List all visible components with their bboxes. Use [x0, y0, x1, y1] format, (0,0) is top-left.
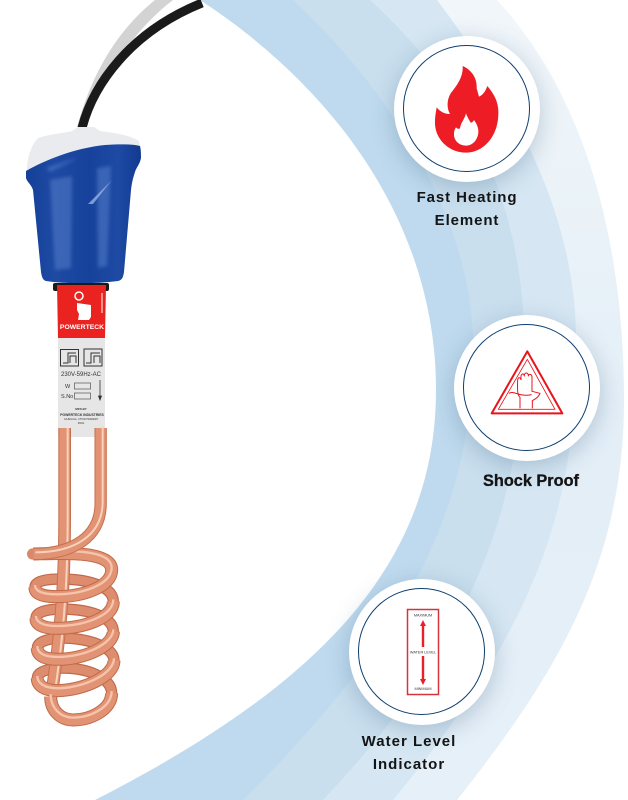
white plug cap [27, 127, 141, 176]
ISI mark right [84, 349, 102, 366]
label: water level indicator [362, 733, 456, 773]
ISI mark left [60, 350, 78, 366]
black cable [82, 3, 202, 128]
plug highlights [46, 158, 111, 270]
label: fast heating element: Fast Heating [417, 189, 517, 206]
black collar [53, 283, 109, 291]
icon: water level gauge: WATER LEVEL [410, 650, 436, 654]
brand name: POWERTECK [60, 324, 104, 331]
arrow [98, 380, 102, 400]
icon: flame badge [394, 36, 540, 182]
blue plug body [26, 144, 141, 283]
icon: water level gauge: MINIMUM [414, 687, 432, 691]
manufacturer text: INDIA [78, 422, 85, 425]
icon: flame [435, 66, 498, 153]
icon: warning triangle with hand [492, 351, 562, 413]
plug glint [88, 180, 112, 204]
gray cable [77, 0, 173, 127]
label: shock proof: Shock Proof [483, 472, 579, 490]
coil back arcs [35, 579, 114, 693]
left tube [52, 428, 68, 693]
icon: water level gauge: MAXIMUM [414, 614, 432, 618]
copper heating coil [27, 426, 114, 720]
label: fast heating element: Element [435, 212, 499, 229]
manufacturer text: POWERTECK INDUSTRIES [60, 413, 104, 417]
feature: water level indicator [340, 575, 506, 773]
serial row: S.No [61, 394, 73, 400]
tag down arrow [101, 293, 103, 313]
wattage row: W [65, 384, 71, 390]
label: water level indicator: Water Level [362, 733, 456, 750]
coil end cap [27, 548, 38, 560]
voltage text: 230V-59Hz-AC [61, 372, 102, 378]
icon: water level badge [349, 579, 495, 725]
icon: shock badge [454, 315, 600, 461]
white specification label [58, 338, 105, 437]
right lead tube [33, 426, 103, 554]
label: water level indicator: Indicator [373, 756, 445, 773]
manufacturer text: GAJRAULA, UTTAR PRADESH [64, 418, 98, 421]
coil front arcs [33, 551, 114, 720]
icon: water level gauge [408, 610, 438, 694]
label: fast heating element [417, 189, 517, 229]
manufacturer text [60, 407, 104, 425]
feature: fast heating element [384, 30, 552, 229]
feature: shock proof [445, 310, 611, 490]
tag head logo [77, 303, 91, 320]
manufacturer text: MFD.BY [75, 407, 87, 411]
red brand tag [57, 285, 106, 338]
